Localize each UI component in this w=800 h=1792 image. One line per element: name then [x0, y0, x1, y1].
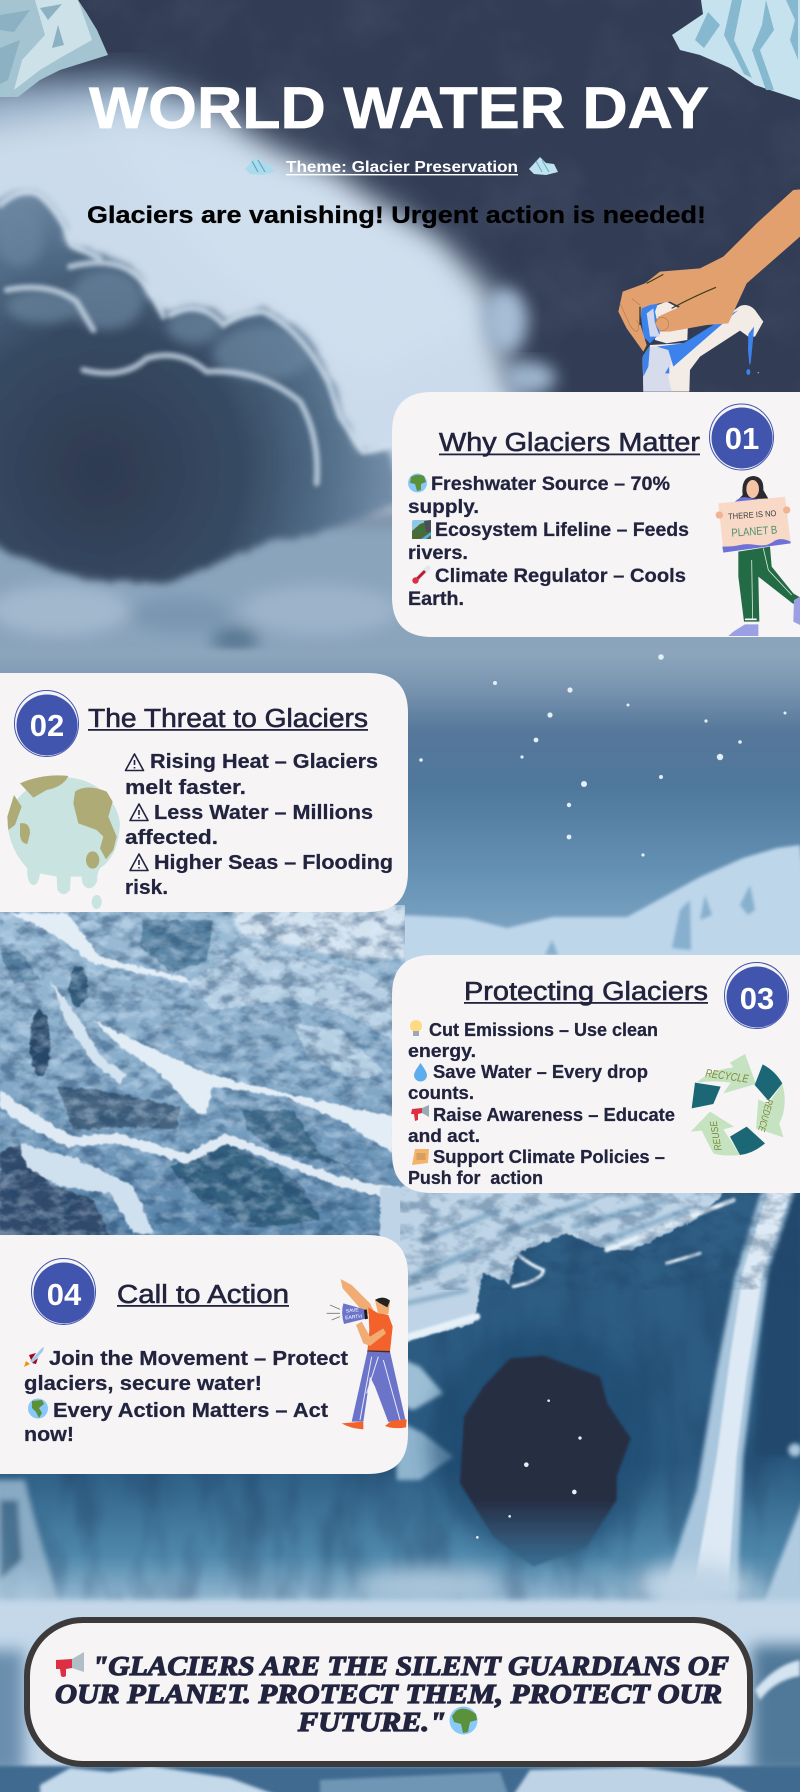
- badge 01: [710, 404, 774, 470]
- emoji: megaphone: [56, 1652, 84, 1677]
- background: foreground ice strip: [0, 1766, 800, 1792]
- bullet list: Less Water – Millions: [154, 801, 373, 824]
- background: below-cloud band: [0, 518, 800, 654]
- heading: Call to Action: [117, 1281, 289, 1309]
- background: snow floor: [0, 1596, 800, 1768]
- illustration: recycle arrows: REUSE: [709, 1120, 725, 1151]
- background: snowflakes: [419, 654, 786, 857]
- subtitle: Glaciers are vanishing! Urgent action is needed!: [87, 202, 706, 229]
- card background: [0, 673, 408, 912]
- faucet: [640, 302, 763, 392]
- illustration: recycle arrows: REDUCE: [755, 1098, 774, 1133]
- heading: The Threat to Glaciers: [88, 705, 368, 733]
- panel: why glaciers matter: [392, 392, 800, 637]
- background: waterfall: [357, 1190, 800, 1610]
- badge 02: 02: [30, 708, 64, 743]
- emoji: globe: [408, 474, 427, 492]
- background: icy mountains: [0, 905, 405, 1250]
- bullet list: risk.: [125, 876, 168, 899]
- bullet list: and act.: [408, 1125, 480, 1146]
- bullet list: melt faster.: [125, 776, 246, 799]
- illustration: activist with sign: [716, 476, 800, 636]
- card background: [392, 392, 800, 637]
- bullet list: counts.: [408, 1082, 474, 1103]
- callout: closing quote: [27, 1620, 750, 1764]
- quote text: "GLACIERS ARE THE SILENT GUARDIANS OF: [92, 1651, 729, 1681]
- card background: [0, 1235, 408, 1474]
- background: rock base: [0, 1190, 800, 1620]
- illustration: recycle arrows: [691, 1054, 785, 1156]
- bullet list: rivers.: [408, 542, 468, 564]
- illustration: person with megaphone: SAVE: [346, 1307, 360, 1315]
- emoji: national park: [412, 520, 431, 539]
- background: snow ridge: [405, 843, 800, 962]
- iceberg: top left: [0, 0, 108, 97]
- background: stormy sky: [0, 57, 800, 962]
- badge 02: [14, 690, 78, 756]
- emoji: megaphone: [411, 1105, 429, 1121]
- bullet list: glaciers, secure water!: [24, 1372, 262, 1395]
- emoji: thermometer: [412, 568, 428, 584]
- illustration: recycle arrows: RECYCLE: [705, 1068, 750, 1086]
- badge 03: [724, 962, 788, 1028]
- background: cave opening: [430, 1330, 657, 1567]
- illustration: person with megaphone: EARTH: [345, 1314, 363, 1321]
- emoji: rocket: [24, 1347, 44, 1367]
- bullet list: Freshwater Source – 70%: [431, 473, 670, 495]
- bullet list: now!: [24, 1423, 74, 1446]
- bullet list: Higher Seas – Flooding: [154, 851, 393, 874]
- emoji: light bulb: [410, 1020, 422, 1036]
- icon: ice crystal left: [245, 157, 275, 175]
- icon: warning 3: [130, 854, 148, 870]
- bullet list: [408, 473, 689, 610]
- bullet list: energy.: [408, 1040, 476, 1061]
- illustration: activist with sign: PLANET B: [731, 524, 778, 540]
- heading: Protecting Glaciers: [464, 978, 708, 1006]
- illustration: melting earth: [7, 775, 120, 909]
- bullet list: Cut Emissions – Use clean: [429, 1019, 658, 1040]
- emoji: americas globe: [28, 1398, 48, 1418]
- background: cave and snow streaks: [357, 1187, 800, 1610]
- bullet list: [24, 1347, 348, 1446]
- panel: the threat to glaciers: [0, 673, 408, 912]
- illustration: hand turning faucet: [618, 189, 800, 392]
- bullet list: Earth.: [408, 588, 464, 610]
- bullet list: [408, 1019, 675, 1188]
- emoji: droplet: [414, 1063, 427, 1081]
- iceberg: top right: [672, 0, 800, 100]
- theme text: Theme: Glacier Preservation: [286, 159, 518, 176]
- callout: closing quote: OUR PLANET. PROTECT THEM, PROTECT OUR: [55, 1679, 722, 1709]
- icon: ice crystal right: [529, 157, 558, 175]
- bullet list: Ecosystem Lifeline – Feeds: [435, 519, 689, 541]
- background: snow streaks above cave: [380, 1187, 733, 1480]
- bullet list: supply.: [408, 496, 479, 518]
- icon: warning 1: [126, 754, 144, 770]
- background: left edge ice streaks: [0, 1480, 60, 1605]
- illustration: person with megaphone: [327, 1279, 407, 1429]
- badge 01: 01: [725, 421, 759, 456]
- heading: Why Glaciers Matter: [439, 429, 701, 457]
- background: dark storm cloud: [0, 189, 400, 583]
- bullet list: Push for action: [408, 1167, 543, 1188]
- emoji: scroll: [412, 1149, 429, 1165]
- background: mottled haze under cloud: [0, 584, 400, 652]
- badge 03: 03: [740, 981, 774, 1016]
- icon: warning 2: [130, 804, 148, 820]
- panel: call to action: [0, 1235, 408, 1474]
- card background: [392, 955, 800, 1193]
- emoji: globe: [450, 1706, 478, 1734]
- hand and arm: [618, 189, 800, 353]
- theme line with ice icons: [245, 157, 558, 176]
- callout frame: [27, 1620, 750, 1764]
- bullet list: [125, 750, 393, 899]
- bullet list: Support Climate Policies –: [433, 1146, 665, 1167]
- bullet list: Raise Awareness – Educate: [433, 1104, 675, 1125]
- background: snow band texture: [400, 1190, 800, 1290]
- bullet list: Every Action Matters – Act: [53, 1399, 328, 1422]
- bullet list: Save Water – Every drop: [433, 1061, 648, 1082]
- illustration: activist with sign: THERE IS NO: [728, 508, 777, 521]
- background: lower sky gradient: [212, 648, 800, 930]
- bullet list: Rising Heat – Glaciers: [150, 750, 378, 773]
- badge 04: [32, 1258, 96, 1324]
- callout: closing quote: FUTURE.": [297, 1707, 446, 1737]
- badge 04: 04: [47, 1277, 82, 1312]
- title: WORLD WATER DAY: [89, 76, 709, 141]
- bullet list: affected.: [125, 826, 218, 849]
- bullet list: Join the Movement – Protect: [49, 1347, 348, 1370]
- panel: protecting glaciers: [392, 955, 800, 1193]
- bullet list: Climate Regulator – Cools: [435, 565, 686, 587]
